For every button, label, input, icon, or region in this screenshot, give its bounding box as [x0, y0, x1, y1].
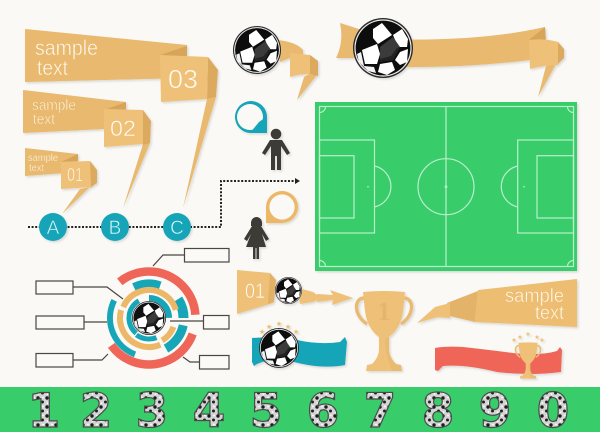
connector lines and label boxes [36, 248, 229, 369]
stars: ★ [534, 334, 540, 341]
stars [259, 320, 299, 336]
stars: ★ [525, 331, 531, 338]
green number strip [0, 384, 600, 432]
large trophy [356, 291, 412, 371]
text: sample text: sample [32, 97, 76, 114]
timeline marker C: C [170, 218, 184, 239]
banner 02 [23, 90, 151, 208]
stars: ★ [511, 337, 517, 344]
stars: ★ [276, 320, 282, 328]
stars: ★ [539, 337, 545, 344]
sample text banner right [417, 279, 577, 327]
text: sample text: text [29, 163, 44, 174]
red ribbon with trophy [435, 331, 562, 379]
icon: woman [244, 217, 269, 259]
blue ribbon with football [252, 320, 347, 368]
icon: football [132, 301, 166, 335]
speech bubble orange [266, 191, 298, 223]
stars [511, 331, 545, 344]
icon: football [353, 18, 413, 78]
banner 03 [25, 29, 218, 208]
red arcs [84, 253, 214, 383]
large ribbon with football [336, 18, 564, 97]
number 01: 01 [245, 280, 265, 303]
text: sample text: sample [505, 286, 564, 307]
circular diagram [36, 248, 229, 383]
number 03: 03 [168, 64, 198, 94]
icon: football [259, 328, 299, 368]
icon: man [262, 129, 290, 170]
text: sample text: text [535, 303, 565, 324]
icon: football [275, 277, 302, 304]
arrow banner 01 with football [237, 270, 353, 314]
text: sample text: text [33, 111, 56, 128]
timeline marker A [39, 213, 67, 241]
teal arcs [99, 268, 199, 368]
small ribbon with football [233, 26, 318, 100]
icon: football [233, 26, 281, 74]
dotted timeline with arrow [28, 178, 300, 227]
number 02: 02 [110, 116, 136, 141]
timeline marker B [101, 213, 129, 241]
stars: ★ [259, 328, 265, 336]
football pitch [315, 102, 577, 271]
trophy number: 1 [378, 297, 390, 326]
icon: small trophy [515, 342, 541, 379]
timeline marker A: A [47, 218, 60, 239]
orange arcs [111, 280, 187, 356]
stars: ★ [293, 328, 299, 336]
number 01: 01 [67, 165, 83, 185]
banner 01 [25, 148, 97, 214]
speech bubble teal [235, 101, 267, 133]
text: sample text: sample [35, 37, 98, 60]
timeline marker C [163, 213, 191, 241]
stars: ★ [285, 323, 291, 331]
digits 1-0 [28, 384, 569, 432]
stars: ★ [266, 323, 272, 331]
text: sample text: text [37, 57, 68, 80]
timeline marker B: B [109, 218, 121, 239]
stars: ★ [517, 334, 523, 341]
text: sample text: sample [28, 153, 58, 164]
